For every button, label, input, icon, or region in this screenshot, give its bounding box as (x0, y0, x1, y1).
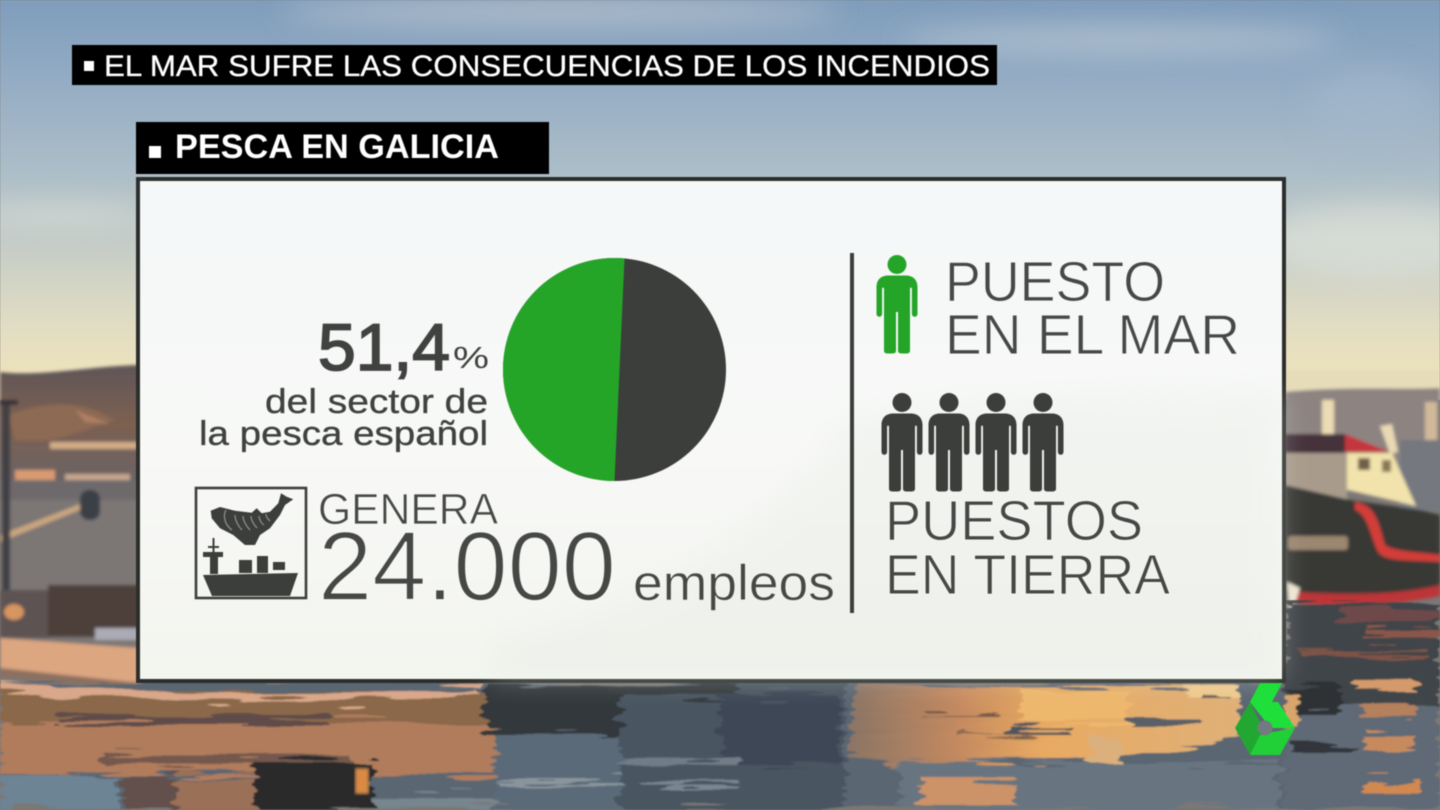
section heading bar (136, 122, 549, 174)
hot reflection in water (355, 768, 369, 794)
label: puesto en el mar (945, 250, 1240, 367)
label: puesto en el mar: PUESTO (945, 250, 1165, 314)
vertical divider (850, 253, 854, 613)
main white panel (138, 179, 1284, 681)
icon: green person, job at sea (876, 255, 918, 354)
channel logo (1235, 683, 1295, 755)
percentage text block: 51,4 (318, 310, 450, 384)
left hills and shore (0, 365, 140, 690)
employment figure (318, 485, 835, 621)
right hills and fishing boat (1285, 370, 1440, 620)
percentage text block: la pesca español (199, 415, 488, 453)
label: puestos en tierra (885, 489, 1170, 607)
clouds in the sky (0, 0, 1440, 276)
employment figure: 24.000 (318, 511, 616, 621)
label: puestos en tierra: EN TIERRA (885, 543, 1170, 607)
percentage text block (199, 310, 489, 453)
top headline bar: EL MAR SUFRE LAS CONSECUENCIAS DE LOS INCENDIOS (104, 50, 990, 83)
percentage text block: % (453, 340, 489, 375)
section heading bar: PESCA EN GALICIA (175, 128, 499, 166)
label: puestos en tierra: PUESTOS (885, 489, 1143, 553)
percentage text block: del sector de (265, 383, 488, 421)
water reflections (0, 600, 1440, 810)
icon: four dark persons, jobs on land (882, 393, 1064, 492)
employment figure: GENERA (318, 485, 499, 534)
employment figure: empleos (633, 555, 835, 611)
icon: fish and cargo ship (196, 488, 306, 598)
label: puesto en el mar: EN EL MAR (945, 303, 1240, 367)
pie chart: 51.4% share (503, 258, 726, 481)
